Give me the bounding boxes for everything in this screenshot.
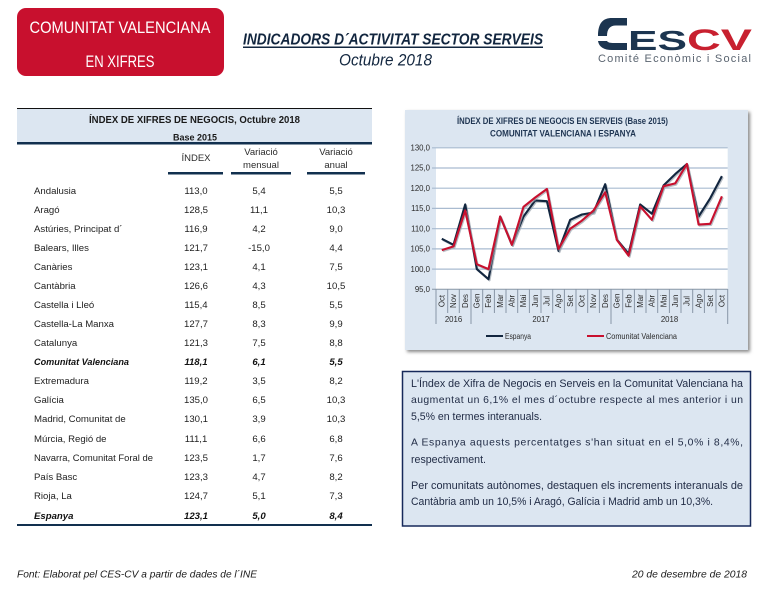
- row: Catalunya: 7,5: [252, 338, 266, 349]
- row: Balears: Balears, Illes: [34, 243, 89, 254]
- row: Cantàbria: Cantàbria: [34, 281, 76, 292]
- row: Comunitat Valenciana: 118,1: [184, 357, 208, 368]
- row: Balears: 4,4: [329, 243, 343, 254]
- x axis month labels: Mai: [659, 294, 668, 307]
- row: Múrcia: 6,8: [329, 434, 343, 445]
- row: Múrcia: Múrcia, Regió de: [34, 434, 107, 445]
- row: Catalunya: Catalunya: [34, 338, 78, 349]
- row: Astúries: [34, 224, 343, 235]
- chart title: [457, 116, 668, 138]
- row: Andalusia: Andalusia: [34, 186, 77, 197]
- y axis labels: [410, 144, 431, 294]
- row: Andalusia: 5,4: [252, 186, 266, 197]
- x axis month labels: Nov: [589, 294, 598, 308]
- row: Balears: -15,0: [248, 243, 270, 254]
- x axis month labels: Oct: [718, 294, 727, 307]
- panel: line chart: [405, 110, 750, 352]
- row: Andalusia: 113,0: [184, 186, 208, 197]
- line series: Espanya: [442, 164, 723, 280]
- y axis labels: 110,0: [411, 224, 431, 233]
- row: Comunitat Valenciana: Comunitat Valenciana: [34, 357, 130, 368]
- row: Canàries: 4,1: [252, 262, 266, 273]
- row: Astúries: 116,9: [184, 224, 208, 235]
- row: Cantàbria: [34, 281, 345, 292]
- column headings: Variació: [244, 147, 278, 158]
- legend: Comunitat Valenciana: [606, 332, 677, 341]
- x axis month labels: Feb: [484, 294, 493, 308]
- x axis year labels: 2018: [661, 315, 678, 324]
- legend: [486, 332, 677, 341]
- row: Canàries: [34, 262, 343, 273]
- x axis month labels: Set: [566, 294, 575, 307]
- row: Madrid: [34, 414, 345, 425]
- row: Espanya: [34, 511, 343, 522]
- chart title: ÍNDEX DE XIFRES DE NEGOCIS EN SERVEIS (Base 2015): [457, 116, 668, 126]
- row: Castella-La Manxa: Castella-La Manxa: [34, 319, 115, 330]
- x axis month labels: [438, 293, 727, 308]
- x axis month labels: Gen: [613, 294, 622, 308]
- row: Castella-La Manxa: [34, 319, 343, 330]
- y axis labels: 120,0: [410, 184, 431, 193]
- title: Octubre 2018: [339, 50, 432, 70]
- row: Cantàbria: 4,3: [252, 281, 266, 292]
- column headings: Variació: [319, 147, 353, 158]
- row: Astúries: 9,0: [329, 224, 343, 235]
- row: Castella i Lleó: [34, 300, 343, 311]
- row: Extremadura: 3,5: [252, 376, 266, 387]
- column headings: anual: [324, 160, 348, 171]
- x axis month labels: Abr: [648, 295, 657, 307]
- x axis month labels: Mar: [636, 294, 645, 308]
- row: País Basc: País Basc: [34, 472, 77, 483]
- row: Aragó: 128,5: [184, 205, 208, 216]
- row: Aragó: [34, 205, 345, 216]
- y axis labels: 95,0: [415, 285, 431, 294]
- x axis month labels: Abr: [508, 295, 517, 307]
- row: Catalunya: 121,3: [184, 338, 208, 349]
- row: Comunitat Valenciana: [34, 357, 343, 368]
- row: Aragó: 10,3: [327, 205, 345, 216]
- x axis month labels: Jul: [683, 296, 692, 306]
- row: Galícia: 6,5: [252, 395, 266, 406]
- x axis month labels: Nov: [449, 294, 458, 308]
- row: País Basc: 8,2: [329, 472, 343, 483]
- row: Castella i Lleó: Castella i Lleó: [34, 300, 94, 311]
- x axis month labels: Mai: [519, 294, 528, 307]
- row: Castella i Lleó: 5,5: [329, 300, 343, 311]
- row: Canàries: Canàries: [34, 262, 73, 273]
- row: Astúries: Astúries, Principat d´: [34, 224, 123, 235]
- row: País Basc: 123,3: [184, 472, 208, 483]
- chart title: COMUNITAT VALENCIANA I ESPANYA: [490, 128, 637, 138]
- text box: commentary: Per comunitats autònomes, destaquen els increments interanuals de: [411, 480, 743, 492]
- line series: Comunitat Valenciana: [442, 164, 723, 270]
- legend: Espanya: [505, 332, 531, 341]
- row: Comunitat Valenciana: 6,1: [252, 357, 266, 368]
- x axis month labels: Des: [601, 294, 610, 308]
- title: [243, 32, 543, 70]
- row: Madrid: 10,3: [327, 414, 345, 425]
- table header: ÍNDEX DE XIFRES DE NEGOCIS, Octubre 2018: [89, 113, 300, 126]
- text box: commentary: [402, 372, 750, 526]
- x axis month labels: Set: [706, 294, 715, 307]
- footer: date: 20 de desembre de 2018: [631, 568, 747, 580]
- row: Navarra: Navarra, Comunitat Foral de: [34, 453, 153, 464]
- row: Rioja: 7,3: [329, 491, 343, 502]
- x axis month labels: Jun: [531, 295, 540, 307]
- column headings: ÍNDEX: [181, 153, 211, 164]
- row: Astúries: 4,2: [252, 224, 266, 235]
- text box: commentary: respectivament.: [411, 454, 486, 466]
- title: INDICADORS D´ACTIVITAT SECTOR SERVEIS: [243, 32, 543, 48]
- logo: CES-CV: CV: [687, 24, 752, 57]
- row: Rioja: [34, 491, 343, 502]
- row: Navarra: 123,5: [184, 453, 208, 464]
- row: Espanya: 123,1: [184, 511, 208, 522]
- row: Canàries: 7,5: [329, 262, 343, 273]
- row: Múrcia: [34, 434, 343, 445]
- row: Galícia: Galícia: [34, 395, 65, 406]
- y axis labels: 115,0: [411, 204, 431, 213]
- panel: data table: [17, 108, 372, 526]
- x axis month labels: Des: [461, 294, 470, 308]
- row: Balears: [34, 243, 343, 254]
- x axis month labels: Ago: [694, 293, 703, 308]
- logo: CES-CV: [598, 18, 752, 65]
- text box: commentary: augmentat un 6,1% el mes d´octubre respecte al mes anterior i un: [411, 394, 743, 406]
- column headings: mensual: [243, 160, 279, 171]
- row: Catalunya: 8,8: [329, 338, 343, 349]
- row: Cantàbria: 10,5: [327, 281, 345, 292]
- row: Navarra: 7,6: [329, 453, 343, 464]
- row: Rioja: 5,1: [252, 491, 266, 502]
- x axis month labels: Oct: [578, 294, 587, 307]
- footer: source: Font: Elaborat pel CES-CV a partir de dades de l´INE: [17, 568, 258, 580]
- x axis year labels: 2017: [532, 315, 550, 324]
- row: País Basc: 4,7: [252, 472, 266, 483]
- x axis year labels: 2016: [445, 315, 462, 324]
- badge: Comunitat Valenciana en xifres: COMUNITAT VALENCIANA: [30, 19, 210, 37]
- table header: [17, 108, 372, 144]
- row: Espanya: Espanya: [34, 511, 74, 522]
- row: Castella-La Manxa: 127,7: [184, 319, 208, 330]
- row: Espanya: 8,4: [329, 511, 343, 522]
- row: Galícia: 10,3: [327, 395, 345, 406]
- text box: commentary: L'Índex de Xifra de Negocis en Serveis en la Comunitat Valenciana ha: [411, 377, 743, 390]
- x axis month labels: Ago: [554, 293, 563, 308]
- y axis labels: 105,0: [410, 245, 431, 254]
- row: País Basc: [34, 472, 343, 483]
- row: Comunitat Valenciana: 5,5: [329, 357, 343, 368]
- row: Extremadura: 119,2: [184, 376, 208, 387]
- x axis month labels: Feb: [624, 294, 633, 308]
- row: Múrcia: 6,6: [252, 434, 266, 445]
- row: Rioja: 124,7: [184, 491, 208, 502]
- badge: Comunitat Valenciana en xifres: EN XIFRES: [86, 53, 154, 71]
- row: Madrid: 3,9: [252, 414, 266, 425]
- row: Galícia: [34, 395, 345, 406]
- y axis labels: 130,0: [410, 144, 431, 152]
- x axis month labels: Gen: [472, 294, 482, 308]
- text box: commentary: A Espanya aquests percentatges s'han situat en el 5,0% i 8,4%,: [411, 438, 743, 448]
- y axis labels: 125,0: [410, 164, 431, 173]
- text box: commentary: 5,5% en termes interanuals.: [411, 411, 542, 423]
- row: Castella-La Manxa: 9,9: [329, 319, 343, 330]
- row: Madrid: 130,1: [184, 414, 208, 425]
- x axis month labels: Mar: [496, 294, 505, 308]
- row: Castella i Lleó: 115,4: [184, 300, 208, 311]
- column headings: [168, 147, 365, 174]
- table header: Base 2015: [173, 132, 218, 144]
- row: Espanya: 5,0: [252, 511, 266, 522]
- row: Andalusia: 5,5: [329, 186, 343, 197]
- row: Andalusia: [34, 186, 343, 197]
- logo: CES-CV: Comité Econòmic i Social: [598, 53, 751, 65]
- row: Múrcia: 111,1: [185, 434, 207, 445]
- row: Madrid: Madrid, Comunitat de: [34, 414, 126, 425]
- row: Aragó: Aragó: [34, 205, 60, 216]
- row: Castella-La Manxa: 8,3: [252, 319, 266, 330]
- logo: CES-CV: ES: [628, 25, 687, 56]
- y axis labels: 100,0: [410, 265, 431, 274]
- row: Castella i Lleó: 8,5: [252, 300, 266, 311]
- row: Canàries: 123,1: [184, 262, 208, 273]
- text box: commentary: Cantàbria amb un 10,5% i Aragó, Galícia i Madrid amb un 10,3%.: [411, 496, 713, 508]
- row: Rioja: Rioja, La: [34, 491, 73, 502]
- x axis year labels: [445, 315, 678, 324]
- badge: Comunitat Valenciana en xifres: [17, 8, 224, 76]
- x axis month labels: Oct: [438, 294, 446, 307]
- row: Galícia: 135,0: [184, 395, 208, 406]
- plot area: [436, 148, 728, 289]
- row: Extremadura: 8,2: [329, 376, 343, 387]
- row: Cantàbria: 126,6: [184, 281, 208, 292]
- row: Aragó: 11,1: [250, 205, 268, 216]
- row: Balears: 121,7: [184, 243, 208, 254]
- row: Catalunya: [34, 338, 343, 349]
- x axis month labels: Jun: [671, 295, 680, 307]
- x axis month labels: Jul: [543, 296, 552, 306]
- row: Extremadura: Extremadura: [34, 376, 90, 387]
- row: Navarra: 1,7: [252, 453, 266, 464]
- row: Extremadura: [34, 376, 343, 387]
- row: Navarra: [34, 453, 343, 464]
